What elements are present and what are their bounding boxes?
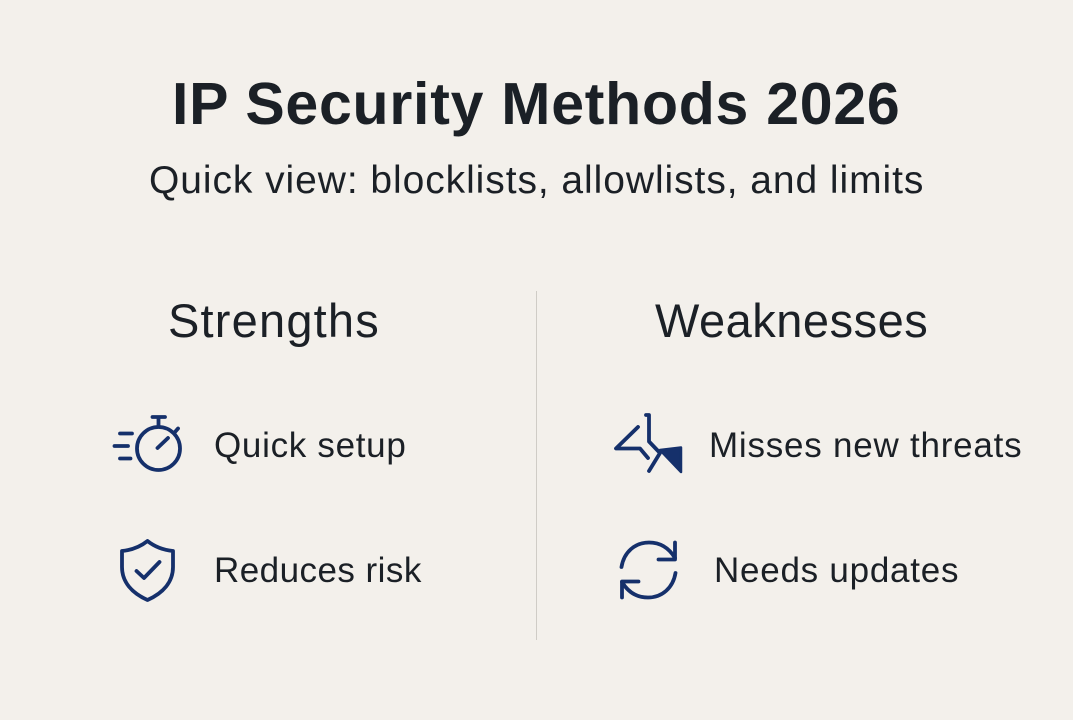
title: IP Security Methods 2026: [172, 71, 900, 137]
label: needs updates: Needs updates: [714, 551, 959, 590]
heading: strengths: Strengths: [168, 294, 380, 347]
heading: weaknesses: Weaknesses: [655, 294, 928, 347]
subtitle: Quick view: blocklists, allowlists, and limits: [149, 159, 924, 202]
label: quick setup: Quick setup: [214, 426, 407, 465]
divider: [536, 291, 537, 640]
label: misses new threats: Misses new threats: [709, 426, 1022, 465]
label: reduces risk: Reduces risk: [214, 551, 422, 590]
